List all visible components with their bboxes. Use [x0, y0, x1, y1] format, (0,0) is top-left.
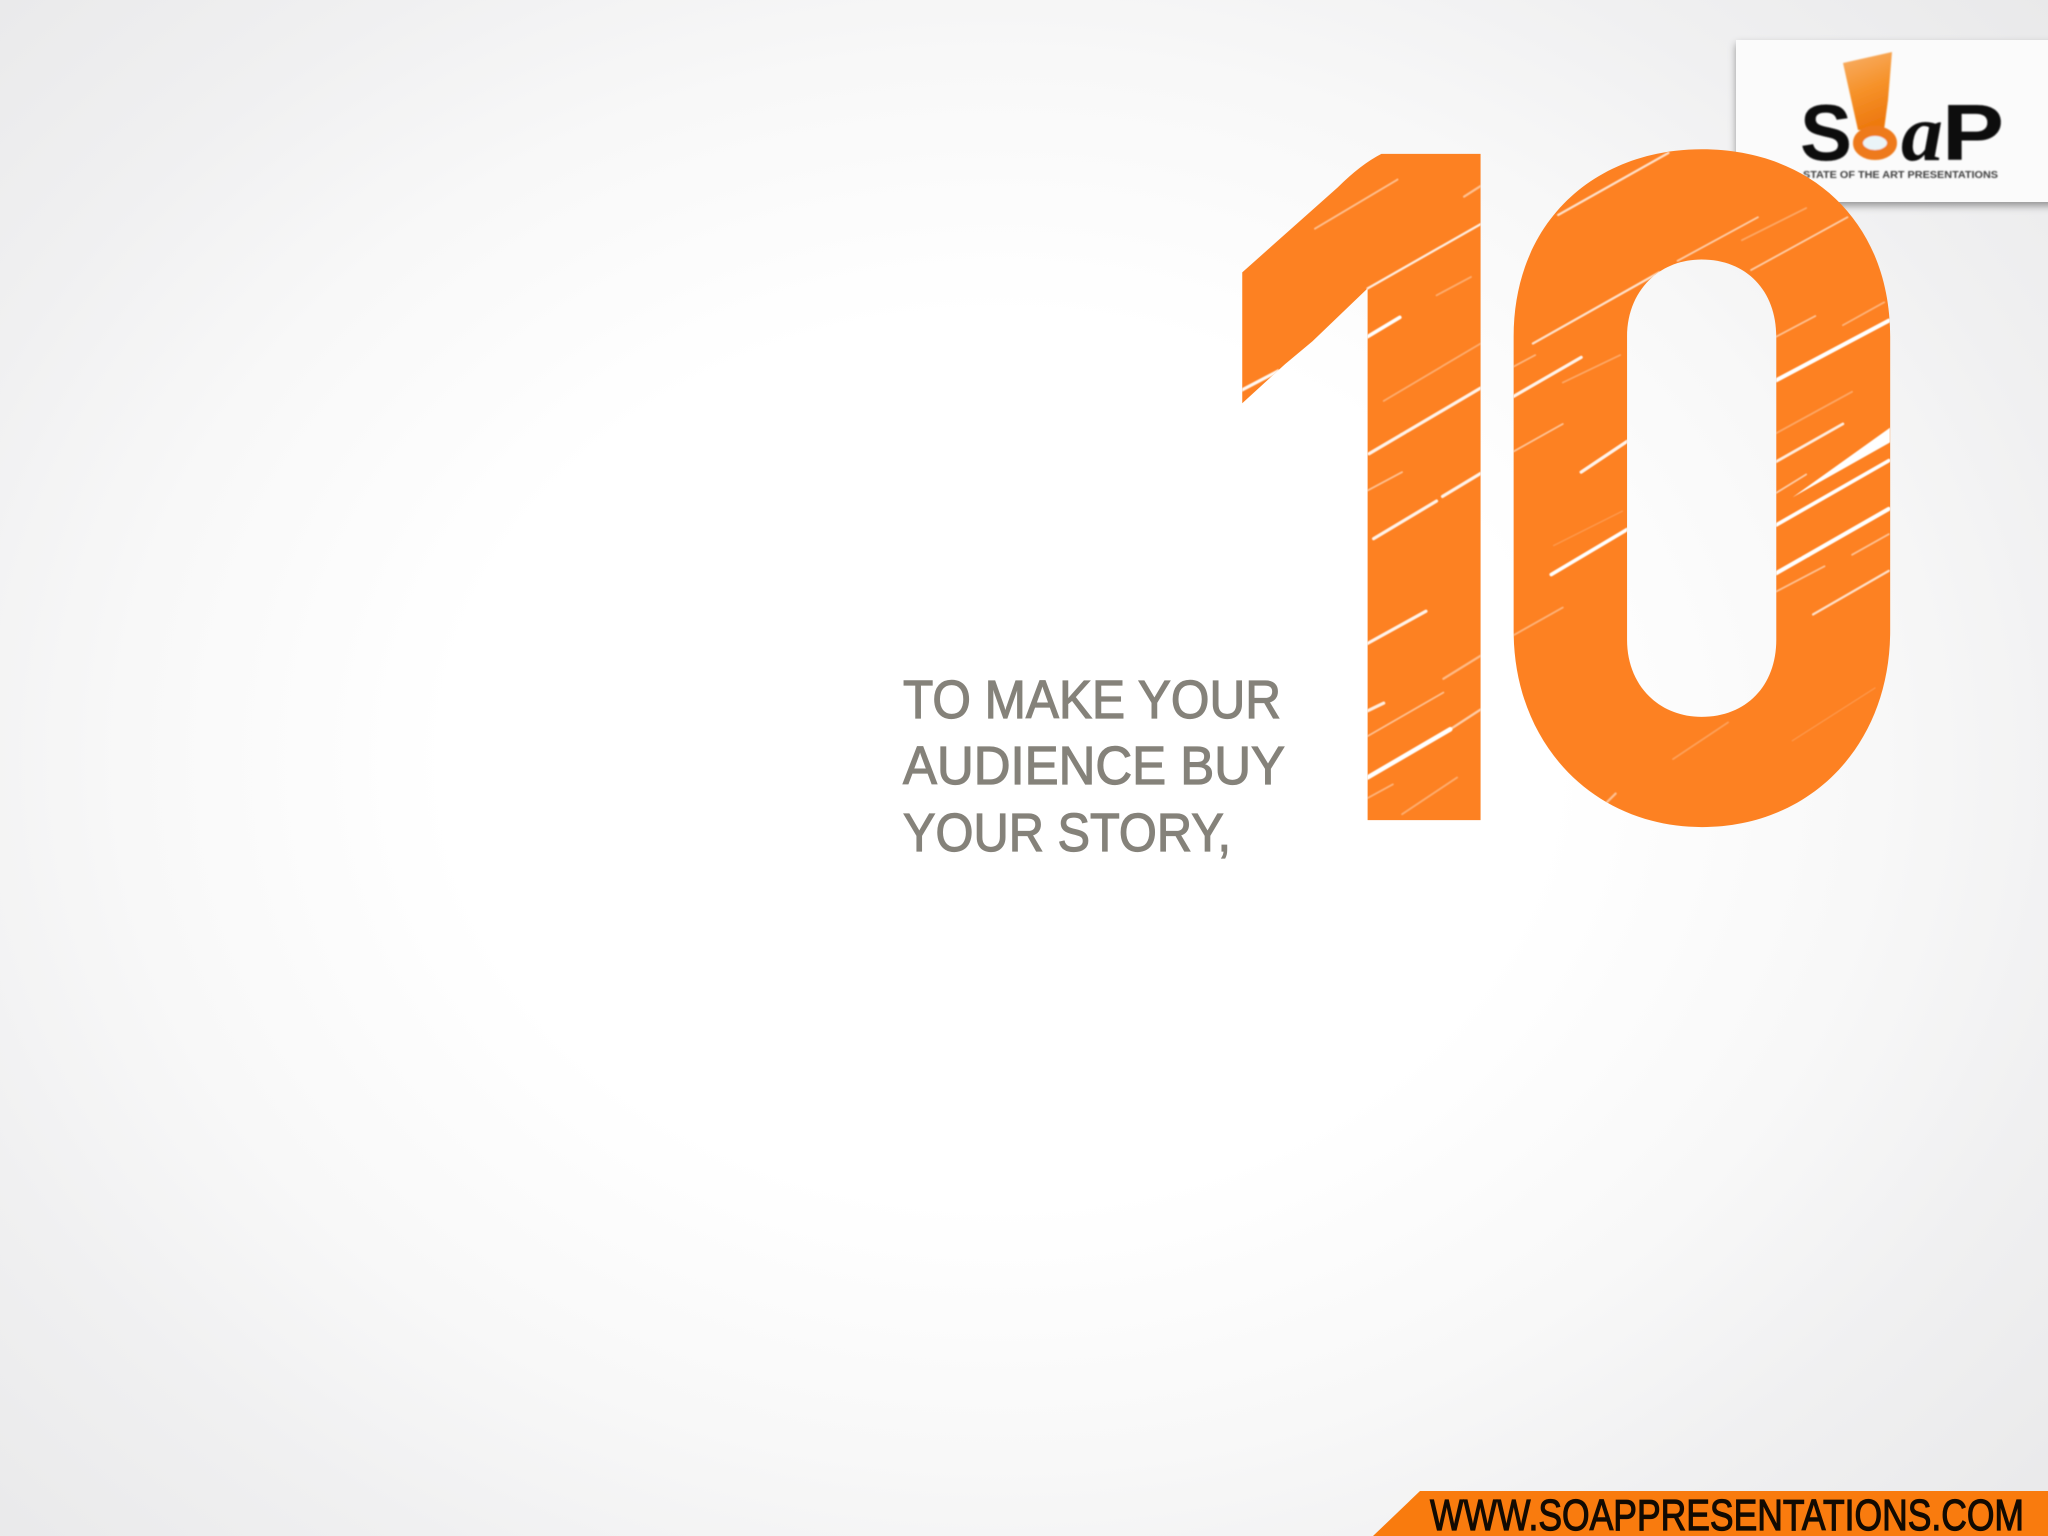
logo letter P: P — [1942, 88, 2004, 177]
line 3: YOUR STORY, — [903, 803, 1231, 863]
icon: orange ring letter o — [1858, 131, 1892, 155]
logo tagline: STATE OF THE ART PRESENTATIONS — [1803, 169, 1998, 181]
logo letter a: a — [1901, 90, 1943, 178]
text block: lead-in sentence — [903, 670, 1285, 863]
soap logo — [1800, 52, 2004, 181]
logo panel — [1736, 40, 2048, 202]
icon: exclamation mark — [1843, 52, 1892, 130]
logo letter S: S — [1800, 88, 1852, 177]
orange banner — [1373, 1491, 2048, 1536]
footer bar — [1373, 1491, 2048, 1536]
digit 1 — [1240, 154, 1481, 820]
big orange number 10 — [1240, 149, 1890, 827]
line 2: AUDIENCE BUY — [903, 736, 1285, 796]
logo card — [1736, 40, 2048, 202]
digit 0 — [1514, 149, 1890, 827]
line 1: TO MAKE YOUR — [903, 670, 1281, 730]
